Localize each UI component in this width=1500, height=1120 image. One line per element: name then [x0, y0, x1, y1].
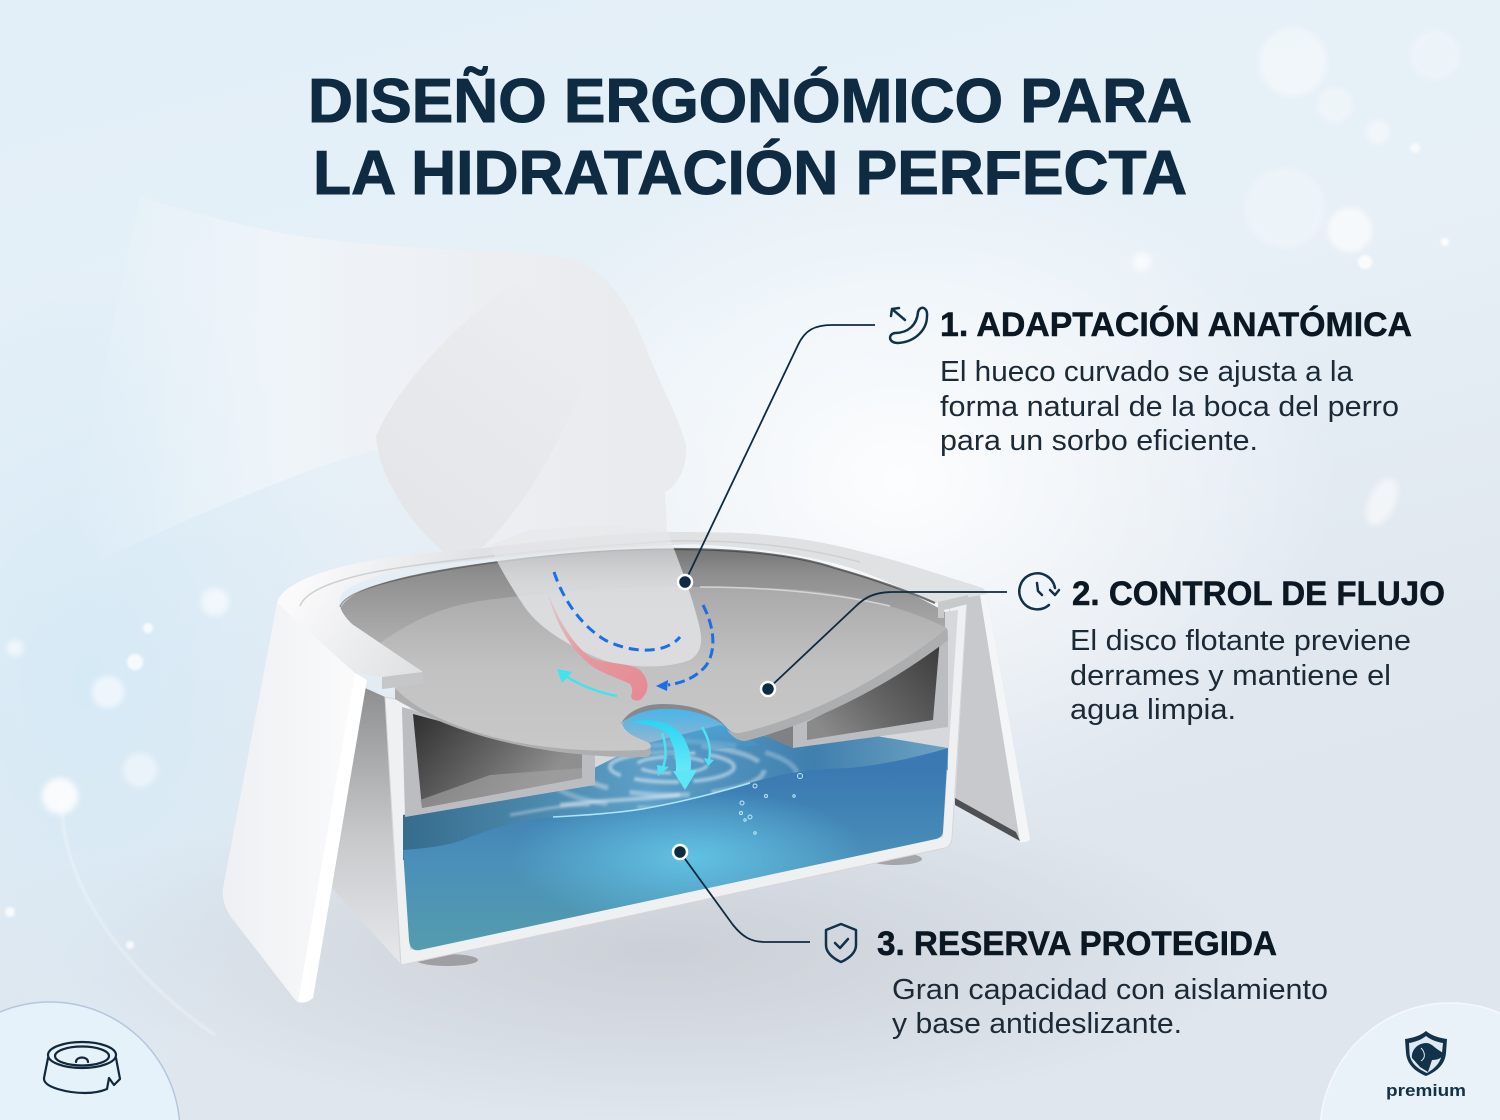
dog tongue: [548, 593, 648, 700]
dog lower jaw: [490, 525, 701, 666]
icon: curved hollow: [890, 308, 927, 343]
inner steel bowl: [340, 549, 945, 665]
body text 1: forma natural de la boca del perro: [940, 391, 1399, 423]
heading 3: 3. RESERVA PROTEGIDA: [877, 925, 1277, 963]
dog ear: [376, 279, 592, 557]
dashed return arrow: [668, 605, 713, 685]
rim steel highlight: [340, 549, 673, 607]
body text 2: [1070, 625, 1411, 726]
disc right edge: [727, 628, 948, 741]
bowl rim: [277, 532, 987, 689]
water surface highlight: [553, 783, 750, 817]
callout leader 2: [761, 592, 1007, 696]
large down arrow: [632, 720, 691, 772]
bowl right outer wall: [955, 593, 1030, 842]
bottom-right badge: [1321, 1003, 1500, 1120]
bottom-left badge: [0, 1002, 179, 1120]
body text 3: [892, 974, 1328, 1040]
dashed arrow around mouth: [554, 572, 680, 650]
water back surface: [403, 725, 948, 860]
right T clip: [938, 595, 968, 618]
notch rim: [621, 704, 727, 728]
bowl left outer wall: [223, 603, 367, 1002]
icon: premium shield with dog: [1405, 1031, 1447, 1076]
icon: bowl: [44, 1042, 120, 1093]
water front face: [403, 748, 948, 950]
right channel: [758, 630, 948, 748]
body text 3: y base antideslizante.: [892, 1008, 1182, 1040]
body text 2: agua limpia.: [1070, 694, 1236, 726]
cavity back: [402, 610, 958, 950]
cyan lapping arrow: [564, 675, 617, 696]
body text 1: El hueco curvado se ajusta a la: [940, 356, 1354, 388]
brand label: premium: [1386, 1081, 1466, 1100]
callout 3: protected reserve: [826, 924, 1328, 1040]
bowl underside interior: [332, 687, 400, 963]
left T clip: [382, 672, 423, 689]
heading 2: 2. CONTROL DE FLUJO: [1072, 575, 1445, 613]
rim groove line: [300, 541, 860, 606]
flow arrows: [554, 572, 714, 790]
dog silhouette: body and head: [60, 197, 686, 580]
small down arrows: [662, 733, 666, 767]
water reservoir: [403, 725, 948, 950]
disc top: [380, 587, 947, 751]
callout 2: flow control: [1019, 573, 1445, 726]
air bubbles: [740, 774, 802, 834]
icon: shield check: [826, 924, 856, 962]
body text 2: derrames y mantiene el: [1070, 660, 1391, 692]
body text 1: [940, 356, 1399, 457]
disc left edge: [395, 688, 651, 757]
water swirl ripples: [510, 741, 797, 815]
water glow: [538, 797, 841, 908]
callout leader 1: [678, 325, 875, 589]
title: DISEÑO ERGONÓMICO PARA: [308, 67, 1192, 136]
callout 1: anatomical fit: [890, 306, 1412, 457]
body text 2: El disco flotante previene: [1070, 625, 1411, 657]
disc highlight: [700, 587, 890, 606]
title: [308, 67, 1192, 208]
cut-away front frame: [385, 600, 967, 965]
title: LA HIDRATACIÓN PERFECTA: [313, 139, 1187, 208]
left channel: [402, 707, 595, 817]
body text 3: Gran capacidad con aislamiento: [892, 974, 1328, 1006]
body text 1: para un sorbo eficiente.: [940, 425, 1258, 457]
icon: clock with arrow: [1019, 573, 1059, 609]
heading 1: 1. ADAPTACIÓN ANATÓMICA: [940, 306, 1412, 344]
floating disc: [380, 587, 948, 757]
callout leader 3: [673, 845, 810, 942]
drain notch water: [622, 708, 760, 756]
bowl feet: [416, 853, 922, 966]
